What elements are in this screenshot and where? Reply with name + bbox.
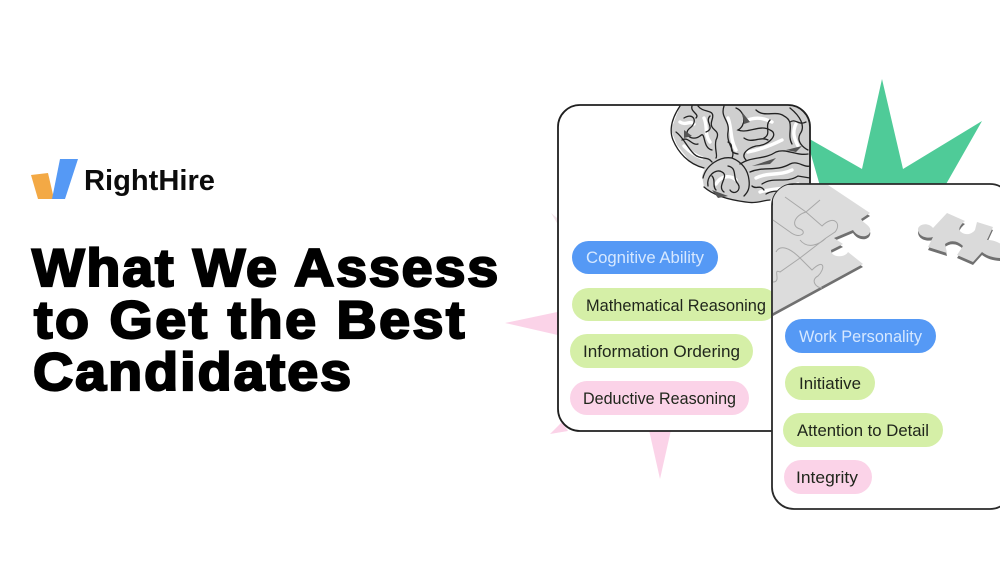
title: Candidates: [33, 342, 351, 402]
pill: Integrity: [784, 460, 872, 494]
pill: Deductive Reasoning: Deductive Reasoning: [583, 389, 736, 408]
pill: Initiative: [785, 366, 875, 400]
icon: brain illustration: [671, 106, 812, 203]
icon: puzzle board: [773, 185, 870, 316]
logo: RightHire: [31, 159, 215, 199]
pill: Work Personality: Work Personality: [799, 327, 922, 346]
panel: cognitive card: [558, 105, 812, 431]
pill: Attention to Detail: Attention to Detail: [797, 421, 929, 440]
title: [32, 238, 498, 402]
brand name: RightHire: [84, 165, 215, 197]
pill: Mathematical Reasoning: [572, 288, 778, 321]
pill: Cognitive Ability: Cognitive Ability: [586, 248, 704, 267]
pill: Deductive Reasoning: [570, 381, 749, 415]
pill: Information Ordering: [570, 334, 753, 368]
decoration: pink star: [505, 213, 671, 479]
pill: Mathematical Reasoning: Mathematical Reasoning: [586, 296, 766, 315]
icon: RightHire check mark: [31, 159, 78, 199]
pill: Initiative: Initiative: [799, 374, 861, 393]
card border: [558, 105, 810, 431]
pill: Information Ordering: Information Ordering: [583, 342, 740, 361]
pill: Work Personality: [785, 319, 936, 353]
panel: personality card: [772, 184, 1000, 509]
decoration: green star: [806, 79, 982, 186]
title: What We Assess: [32, 238, 498, 298]
icon: loose puzzle piece: [918, 213, 1000, 265]
pill: Cognitive Ability: [572, 241, 718, 274]
pill: Attention to Detail: [783, 413, 943, 447]
pill: Integrity: Integrity: [796, 468, 858, 487]
title: to Get the Best: [34, 290, 465, 350]
